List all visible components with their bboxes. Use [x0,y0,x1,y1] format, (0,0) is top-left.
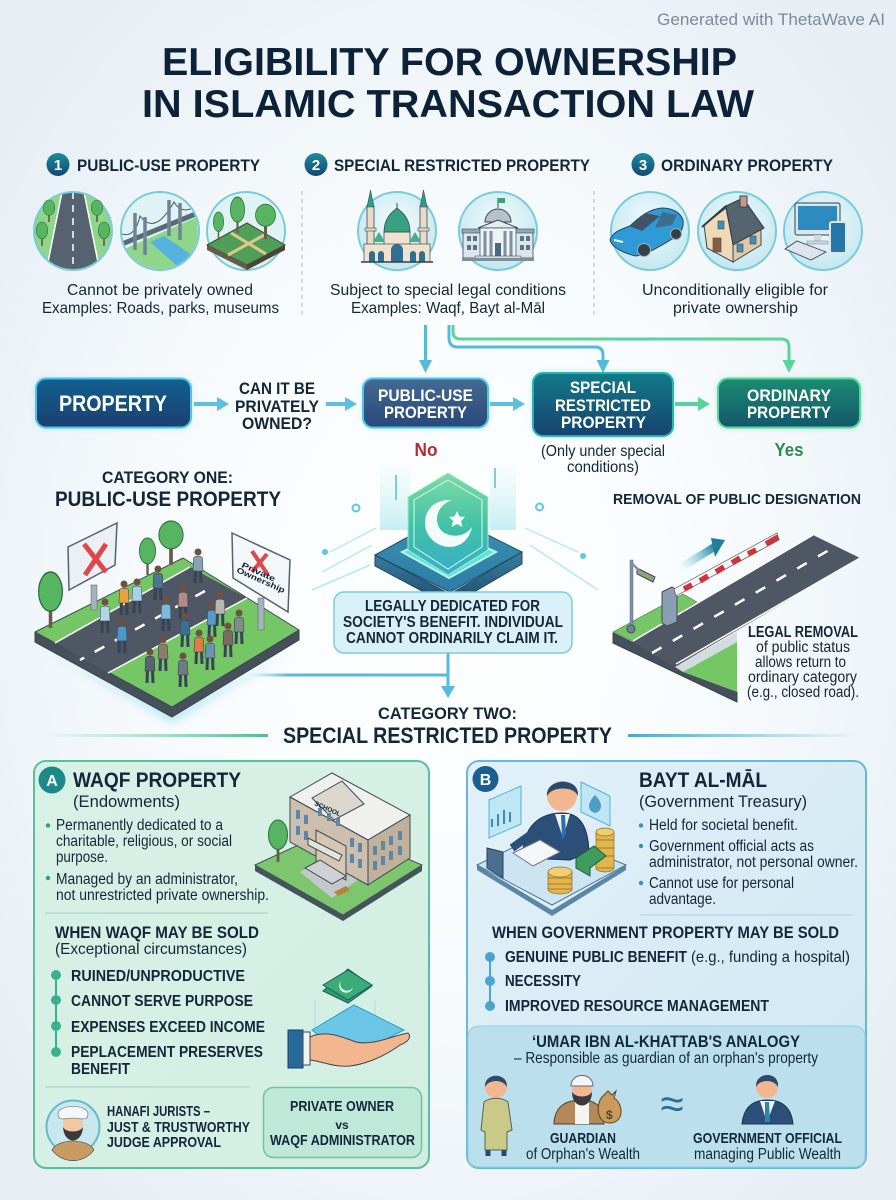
badge A: A [46,773,58,790]
timeline list: IMPROVED RESOURCE MANAGEMENT [505,998,769,1015]
badge 3 [632,153,654,176]
people [100,548,244,687]
question [235,379,320,433]
heading: umar analogy: ‘UMAR IBN AL-KHATTAB'S ANALOGY [532,1032,801,1051]
illustration: waqf school building [255,773,422,921]
arrow: to special restricted [449,325,610,373]
figure: guardian: $ [606,1108,613,1122]
timeline list: (e.g., funding a hospital) [691,949,850,966]
description: Examples: Waqf, Bayt al-Māl [351,300,545,317]
box: private owner vs waqf administrator: vs [335,1118,349,1132]
icon: computer [784,192,862,270]
icon: car [610,192,689,270]
text: legal removal: ordinary category [748,669,857,686]
flow box: special restricted: RESTRICTED [555,396,651,415]
heading: category one: PUBLIC-USE PROPERTY [55,487,281,511]
timeline list: GENUINE PUBLIC BENEFIT [505,949,687,966]
flow box: property: PROPERTY [59,391,167,416]
flow box: special restricted [533,373,673,436]
description: Unconditionally eligible for [642,282,829,299]
panel: special restricted overview [304,153,591,317]
heading: bayt al-mal [639,769,807,811]
bullet list: administrator, not personal owner. [649,854,858,871]
timeline list: EXPENSES EXCEED INCOME [71,1019,265,1036]
flow box: special restricted: SPECIAL [570,378,636,397]
heading: category one: CATEGORY ONE: [102,468,233,487]
timeline list: NECESSITY [505,973,581,990]
label: no: No [414,440,438,460]
heading: bayt al-mal: (Government Treasury) [639,792,807,811]
flow box: public-use [363,378,488,428]
description [42,282,279,317]
figure: government official [742,1075,793,1124]
arrow [490,397,525,411]
flow box: ordinary: ORDINARY [747,386,832,405]
bullet list: charitable, religious, or social [56,833,232,850]
panel: public-use property overview [34,153,285,317]
title [142,41,755,126]
figure: orphan child [481,1076,512,1156]
arrow [675,397,710,411]
badge 2 [304,153,328,176]
panel B: bayt al-mal [467,761,866,1168]
description: private ownership [673,300,798,317]
arrow: to public-use [419,325,432,373]
heading: category two [283,704,612,748]
icon: park [207,192,285,270]
flow box: ordinary [718,378,860,428]
bullet list: Government official acts as [649,838,814,855]
heading: when waqf may be sold: WHEN WAQF MAY BE SOLD [55,923,259,942]
text: hanafi jurists [107,1103,250,1151]
icon: mosque [358,190,436,270]
labels: guardian and official: GUARDIAN [550,1130,616,1147]
illustration: treasury official at desk [477,781,626,916]
analogy background [468,1026,865,1167]
heading: when waqf may be sold [55,923,259,958]
text: legal removal: (e.g., closed road). [747,684,859,701]
callout [334,592,572,653]
description: Examples: Roads, parks, museums [42,300,279,317]
flow box: public-use: PUBLIC-USE [378,386,473,405]
labels: guardian and official: managing Public Wealth [694,1146,841,1163]
arrow [194,397,229,411]
timeline list: CANNOT SERVE PURPOSE [71,993,253,1010]
flow box: public-use: PROPERTY [384,403,468,422]
text: legal removal: LEGAL REMOVAL [748,624,858,641]
panel A: waqf property [34,761,429,1168]
illustration: hand holding waqf notes [288,969,410,1068]
arrow: to category two [250,653,455,698]
heading: umar analogy: – Responsible as guardian of an orphan's property [514,1050,818,1067]
labels: guardian and official: GOVERNMENT OFFICIAL [693,1130,842,1147]
watermark: Generated with ThetaWave AI [657,10,885,29]
badge 1 [46,153,70,176]
sign: right: Private [240,561,277,584]
badge B [472,766,498,792]
box: private owner vs waqf administrator: WAQF ADMINISTRATOR [270,1132,415,1149]
bullet list: Held for societal benefit. [649,817,798,834]
emblem: crescent shield [375,473,522,606]
description [330,282,566,317]
heading: waqf [73,768,241,811]
text: legal removal: of public status [756,639,850,656]
badge B: B [480,772,491,789]
arrow: to ordinary [453,325,796,373]
heading: removal of public designation: REMOVAL OF PUBLIC DESIGNATION [613,491,861,508]
label: only under special conditions [541,443,665,476]
bullet list [46,817,269,904]
bullet list: Managed by an administrator, [56,871,238,888]
callout: CANNOT ORDINARILY CLAIM IT. [346,630,558,647]
box: private owner vs waqf administrator [264,1088,422,1158]
rays around emblem [312,462,598,590]
illustration: road with barrier [613,533,860,702]
heading: category two: CATEGORY TWO: [378,704,517,723]
icon: jurist portrait [46,1100,100,1161]
text: legal removal [747,624,859,701]
callout: LEGALLY DEDICATED FOR [365,598,540,615]
sign: left [68,523,117,610]
description [642,282,829,317]
bullet list [639,817,858,908]
figure: guardian [554,1076,621,1124]
description: Subject to special legal conditions [330,282,566,299]
bullet list: purpose. [56,849,108,866]
badge 1: 1 [54,157,62,174]
sign: right: Ownership [235,566,286,595]
heading: when waqf may be sold: (Exceptional circumstances) [55,941,247,958]
description: Cannot be privately owned [67,282,253,299]
text: hanafi jurists: JUST & TRUSTWORTHY [107,1119,250,1136]
labels: guardian and official: of Orphan's Wealth [526,1146,640,1163]
title: ELIGIBILITY FOR OWNERSHIP [162,41,737,84]
timeline list [51,968,265,1078]
label: only under special conditions: (Only under special [541,443,665,460]
bullet list: advantage. [649,891,716,908]
labels: guardian and official [526,1130,842,1163]
icon: road [34,190,112,272]
heading: special restricted: SPECIAL RESTRICTED PROPERTY [334,156,591,175]
bullet list: Permanently dedicated to a [56,817,223,834]
icon: government building [459,192,537,270]
timeline list: BENEFIT [71,1061,130,1078]
flow box: special restricted: PROPERTY [561,413,647,432]
panel: ordinary overview [610,153,862,317]
timeline list: PEPLACEMENT PRESERVES [71,1044,263,1061]
heading: bayt al-mal: BAYT AL-MĀL [639,769,767,792]
arrow [326,397,357,411]
illustration: waqf school building: SCHOOL [313,800,342,818]
heading: category one [55,468,281,511]
illustration: public road with people [35,521,299,722]
heading: when government property may be sold: WHEN GOVERNMENT PROPERTY MAY BE SOLD [492,923,839,942]
icon: house [698,192,776,270]
timeline list: RUINED/UNPRODUCTIVE [71,968,245,985]
box: private owner vs waqf administrator: PRIVATE OWNER [290,1098,394,1115]
flow box: ordinary: PROPERTY [747,403,832,422]
heading: waqf: WAQF PROPERTY [73,768,241,792]
label: only under special conditions: conditions) [567,459,639,476]
question: PRIVATELY [235,397,320,416]
callout: SOCIETY'S BENEFIT. INDIVIDUAL [343,614,563,631]
bullet list: not unrestricted private ownership. [56,887,269,904]
timeline list [485,949,850,1015]
heading: waqf: (Endowments) [73,793,180,811]
sign: right [232,533,290,630]
title: IN ISLAMIC TRANSACTION LAW [142,83,755,126]
question: OWNED? [242,414,312,433]
symbol: approximately equal: ≈ [660,1080,684,1127]
question: CAN IT BE [239,379,315,398]
heading: ordinary: ORDINARY PROPERTY [661,156,834,175]
badge 3: 3 [639,157,647,174]
flow box: property [36,378,191,428]
text: hanafi jurists: JUDGE APPROVAL [107,1134,221,1151]
heading: umar analogy [514,1032,818,1067]
bullet list: Cannot use for personal [649,875,794,892]
icon: bridge [121,192,200,272]
badge 2: 2 [312,157,320,174]
label: yes: Yes [774,440,804,460]
heading: public-use: PUBLIC-USE PROPERTY [77,156,261,175]
text: hanafi jurists: HANAFI JURISTS – [107,1103,210,1120]
badge A [38,766,66,794]
text: legal removal: allows return to [755,654,846,671]
heading: category two: SPECIAL RESTRICTED PROPERTY [283,723,612,748]
